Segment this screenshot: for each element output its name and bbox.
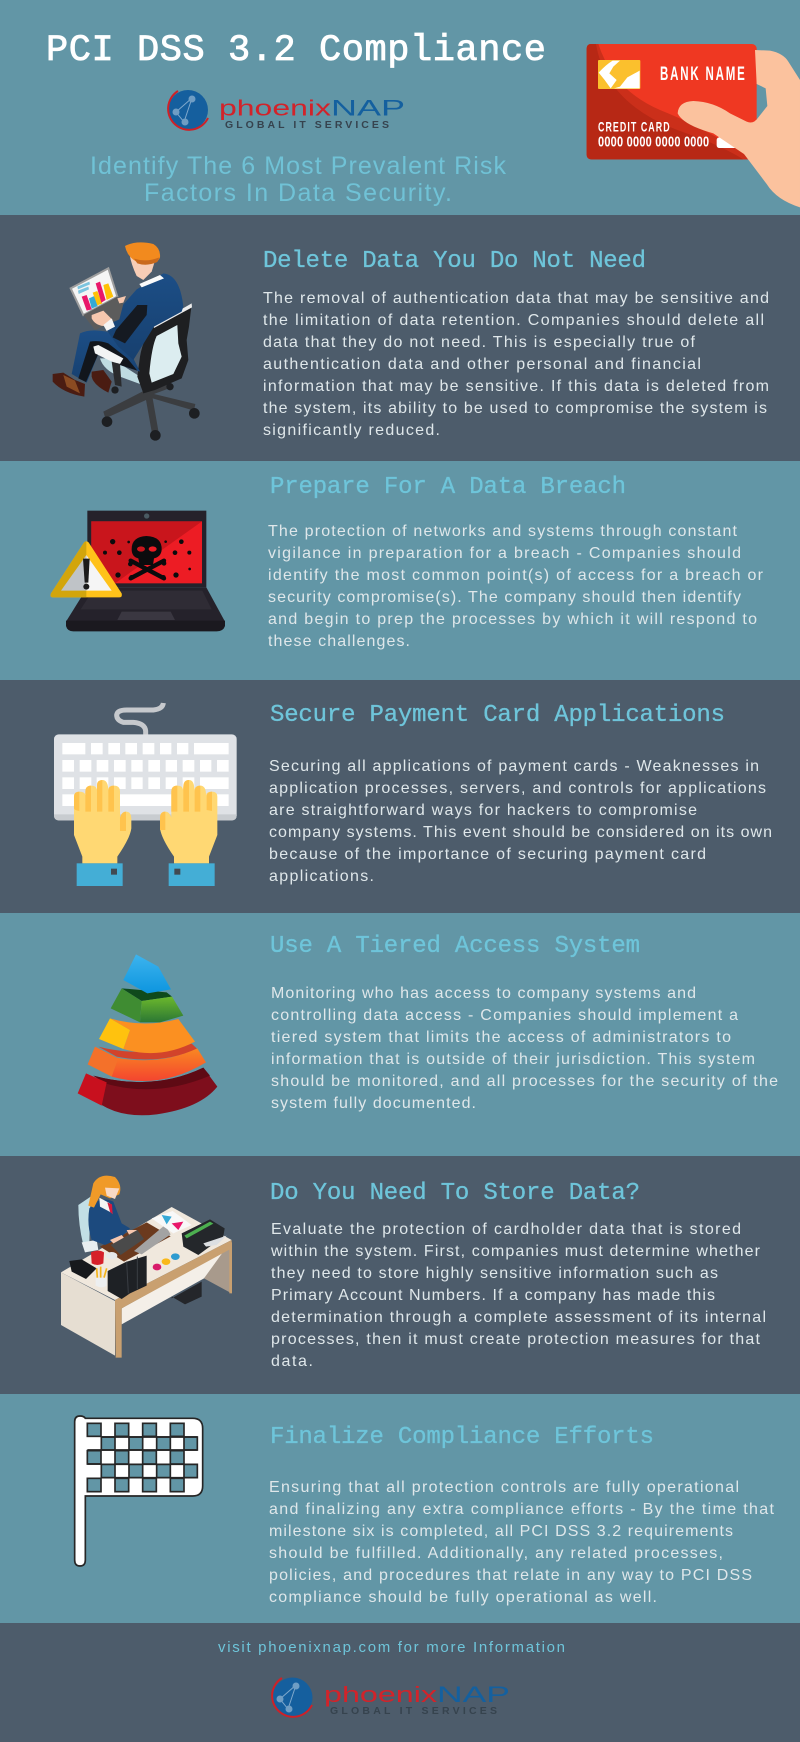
panel: prepare for breach [0, 461, 800, 680]
body text [271, 985, 778, 1112]
left hand [74, 780, 131, 886]
icon: credit card in hand: 0000 0000 0000 0000 [598, 135, 709, 151]
body text: The removal of authentication data that may be sensitive and [263, 290, 769, 307]
body text: should be fulfilled. Additionally, any related processes, [269, 1545, 723, 1562]
heading: Do You Need To Store Data? [270, 1180, 640, 1207]
tier 5 maroon [78, 1068, 217, 1115]
heading: Finalize Compliance Efforts [270, 1424, 654, 1451]
icon: credit card in hand: CREDIT CARD [598, 119, 671, 135]
body text: processes, then it must create protection measures for that [271, 1331, 761, 1348]
body text: security compromise(s). The company should then identify [268, 589, 741, 606]
footer link text: visit phoenixnap.com for more Information [218, 1639, 565, 1656]
body text: compliance should be fully operational as well. [269, 1589, 657, 1606]
tier 1 blue [123, 954, 171, 993]
body text: data. [271, 1353, 313, 1370]
hand [678, 50, 800, 207]
icon: layered pyramid [78, 954, 217, 1115]
body text: because of the importance of securing payment card [269, 846, 706, 863]
subtitle: Identify The 6 Most Prevalent Risk [90, 152, 506, 180]
tier 3 orange [99, 1018, 195, 1053]
body text: they need to store highly sensitive information such as [271, 1265, 718, 1282]
right hand [160, 780, 217, 886]
logo: phoenixNAP header: NAP [331, 96, 405, 120]
body text [270, 1221, 766, 1370]
body text [268, 523, 764, 650]
body text [263, 290, 769, 439]
body text: authentication data and other personal and financial [263, 356, 701, 373]
body text [269, 758, 772, 885]
logo: phoenixNAP header: phoenix [219, 96, 331, 120]
title: PCI DSS 3.2 Compliance [46, 30, 546, 72]
body text: the limitation of data retention. Companies should delete all [263, 312, 764, 329]
heading: Prepare For A Data Breach [270, 474, 626, 501]
logo: phoenixNAP header: GLOBAL IT SERVICES [225, 119, 389, 131]
panel: delete data [0, 215, 800, 461]
logo: phoenixNAP footer [272, 1678, 510, 1718]
chip with world map [598, 60, 640, 89]
subtitle: Factors In Data Security. [144, 179, 452, 207]
body text: policies, and procedures that relate in any way to PCI DSS [269, 1567, 752, 1584]
icon: woman working at desk [61, 1176, 232, 1358]
skull and crossbones [103, 536, 191, 580]
heading: Delete Data You Do Not Need [263, 248, 646, 275]
icon: keyboard with hands [54, 703, 237, 886]
tier 4 red-orange [88, 1044, 206, 1081]
logo: phoenixNAP footer: GLOBAL IT SERVICES [330, 1705, 497, 1717]
body text: milestone six is completed, all PCI DSS 3.2 requirements [269, 1523, 733, 1540]
body text: system fully documented. [271, 1095, 476, 1112]
panel: tiered access [0, 913, 800, 1156]
logo: phoenixNAP header [168, 90, 405, 131]
heading: Use A Tiered Access System [270, 933, 640, 960]
body text: within the system. First, companies must determine whether [270, 1243, 761, 1260]
body text: these challenges. [268, 633, 410, 650]
body text: applications. [269, 868, 374, 885]
panel: header [0, 0, 800, 215]
icon: credit card in hand [587, 44, 800, 207]
warning triangle [51, 541, 122, 597]
subtitle [90, 152, 506, 207]
panel: secure payment card [0, 680, 800, 913]
body text: are straightforward ways for hackers to compromise [269, 802, 697, 819]
body text: and begin to prep the processes by which it will respond to [268, 611, 757, 628]
body text: Securing all applications of payment cards - Weaknesses in [269, 758, 759, 775]
body text: vigilance in preparation for a breach - Companies should [268, 545, 741, 562]
logo: phoenixNAP footer: NAP [437, 1682, 510, 1707]
body text: identify the most common point(s) of access for a breach or [268, 567, 764, 584]
panel: store data [0, 1156, 800, 1394]
logo: phoenixNAP footer: phoenix [324, 1682, 437, 1707]
body text: the system, its ability to be used to compromise the system is [263, 400, 767, 417]
tier 2 green [111, 988, 183, 1022]
body text: significantly reduced. [263, 422, 440, 439]
body text: and finalizing any extra compliance efforts - By the time that [269, 1501, 775, 1518]
body text: should be monitored, and all processes for the security of the [271, 1073, 778, 1090]
body text: Monitoring who has access to company systems and [271, 985, 696, 1002]
body text: Evaluate the protection of cardholder data that is stored [271, 1221, 741, 1238]
body text: Primary Account Numbers. If a company has made this [271, 1287, 715, 1304]
body text: company systems. This event should be considered on its own [269, 824, 772, 841]
panel: finalize compliance [0, 1394, 800, 1623]
body text: determination through a complete assessment of its internal [271, 1309, 766, 1326]
icon: checkered flag [75, 1416, 203, 1566]
icon: man on office chair with laptop [53, 242, 200, 441]
body text: data that they do not need. This is especially true of [263, 334, 696, 351]
icon: hacked laptop with warning sign [51, 511, 225, 631]
body text: application processes, servers, and controls for applications [269, 780, 766, 797]
body text: tiered system that limits the access of administrators to [271, 1029, 731, 1046]
body text [269, 1479, 775, 1606]
body text: The protection of networks and systems through constant [268, 523, 738, 540]
panel: footer [0, 1623, 800, 1742]
heading: Secure Payment Card Applications [270, 702, 725, 729]
icon: credit card in hand: BANK NAME [660, 64, 747, 85]
body text: controlling data access - Companies should implement a [271, 1007, 738, 1024]
body text: Ensuring that all protection controls are fully operational [269, 1479, 739, 1496]
body text: information that may be sensitive. If this data is deleted from [263, 378, 769, 395]
body text: information that is outside of their jurisdiction. This system [271, 1051, 755, 1068]
